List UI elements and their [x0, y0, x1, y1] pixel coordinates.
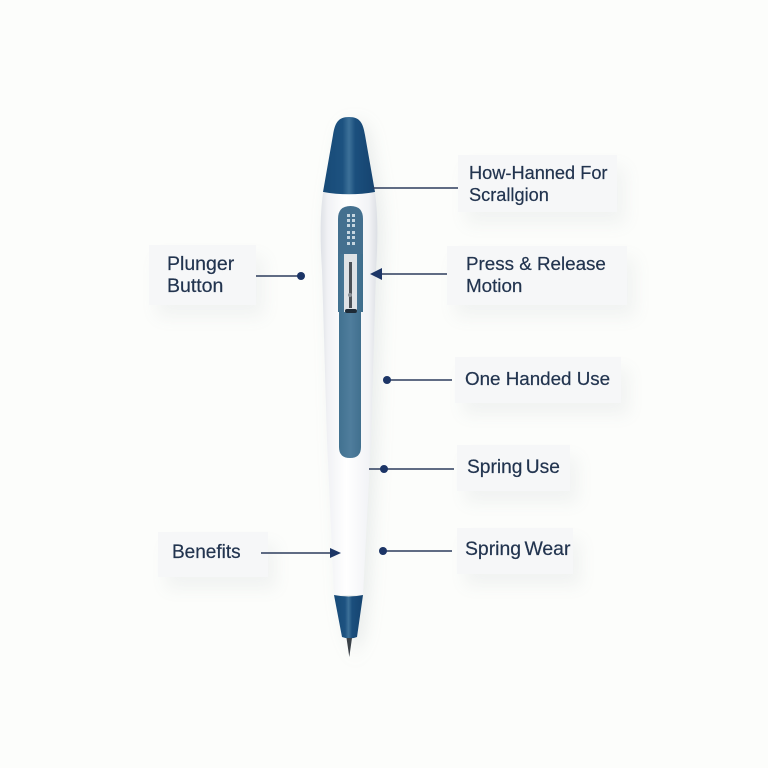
label: Spring Use	[457, 445, 570, 491]
label: How-Hanned For Scrallgion	[458, 155, 617, 212]
connector: cap	[373, 187, 458, 189]
label: Spring Wear	[457, 528, 573, 574]
lower collar	[334, 595, 363, 638]
label: Press & Release Motion: Press & Release	[466, 253, 606, 274]
connector: benefits	[261, 548, 341, 558]
label: Spring Wear: Spring Wear	[465, 538, 570, 560]
label: Press & Release Motion	[447, 246, 627, 305]
label: Press & Release Motion: Motion	[466, 274, 522, 296]
label: One Handed Use	[455, 357, 621, 403]
needle tip	[346, 638, 352, 657]
label: Benefits	[158, 532, 268, 577]
pen cap	[323, 117, 375, 194]
connector: spring wear	[379, 547, 452, 555]
pen body	[321, 193, 377, 595]
grip window	[338, 206, 363, 458]
connector: plunger	[256, 272, 305, 280]
label: Plunger Button: Plunger	[167, 253, 234, 275]
label: Benefits: Benefits	[172, 542, 241, 563]
label: How-Hanned For Scrallgion: How-Hanned For	[469, 163, 607, 183]
label: One Handed Use: One Handed Use	[465, 368, 610, 389]
connector: spring use	[369, 465, 454, 473]
label: Plunger Button	[149, 245, 256, 305]
label: Spring Use: Spring Use	[467, 457, 560, 478]
connector: press arrow	[370, 268, 447, 280]
label: Plunger Button: Button	[167, 274, 223, 296]
label: How-Hanned For Scrallgion: Scrallgion	[469, 184, 549, 204]
connector: one handed	[383, 376, 452, 384]
